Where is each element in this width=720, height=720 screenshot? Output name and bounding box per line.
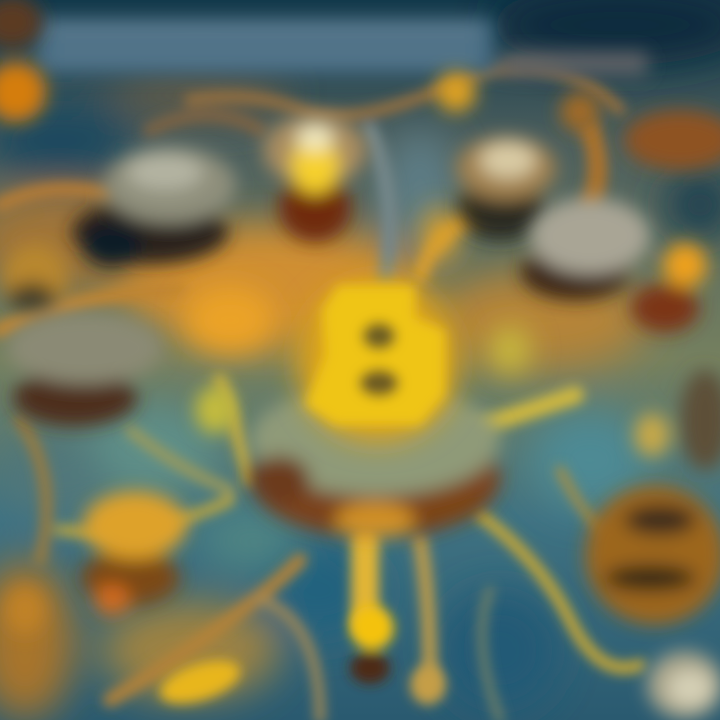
node: top-left silver coin stack [72, 147, 236, 267]
node: bottom yellow coins [154, 606, 446, 712]
node: right gold stack [585, 370, 720, 625]
node: right silver coin stack [521, 92, 720, 332]
left orange glow [184, 207, 530, 374]
node: left coin stack [3, 244, 235, 434]
node: top-right coin [436, 72, 556, 240]
central platform ring [250, 384, 500, 538]
bitcoin symbol [296, 278, 460, 442]
node: bottom-right pale coin [647, 651, 720, 719]
node: top glowing coin [263, 114, 367, 242]
title band [34, 18, 648, 76]
top-left orange node [0, 0, 46, 122]
node: lower-left gold coin [5, 491, 187, 634]
